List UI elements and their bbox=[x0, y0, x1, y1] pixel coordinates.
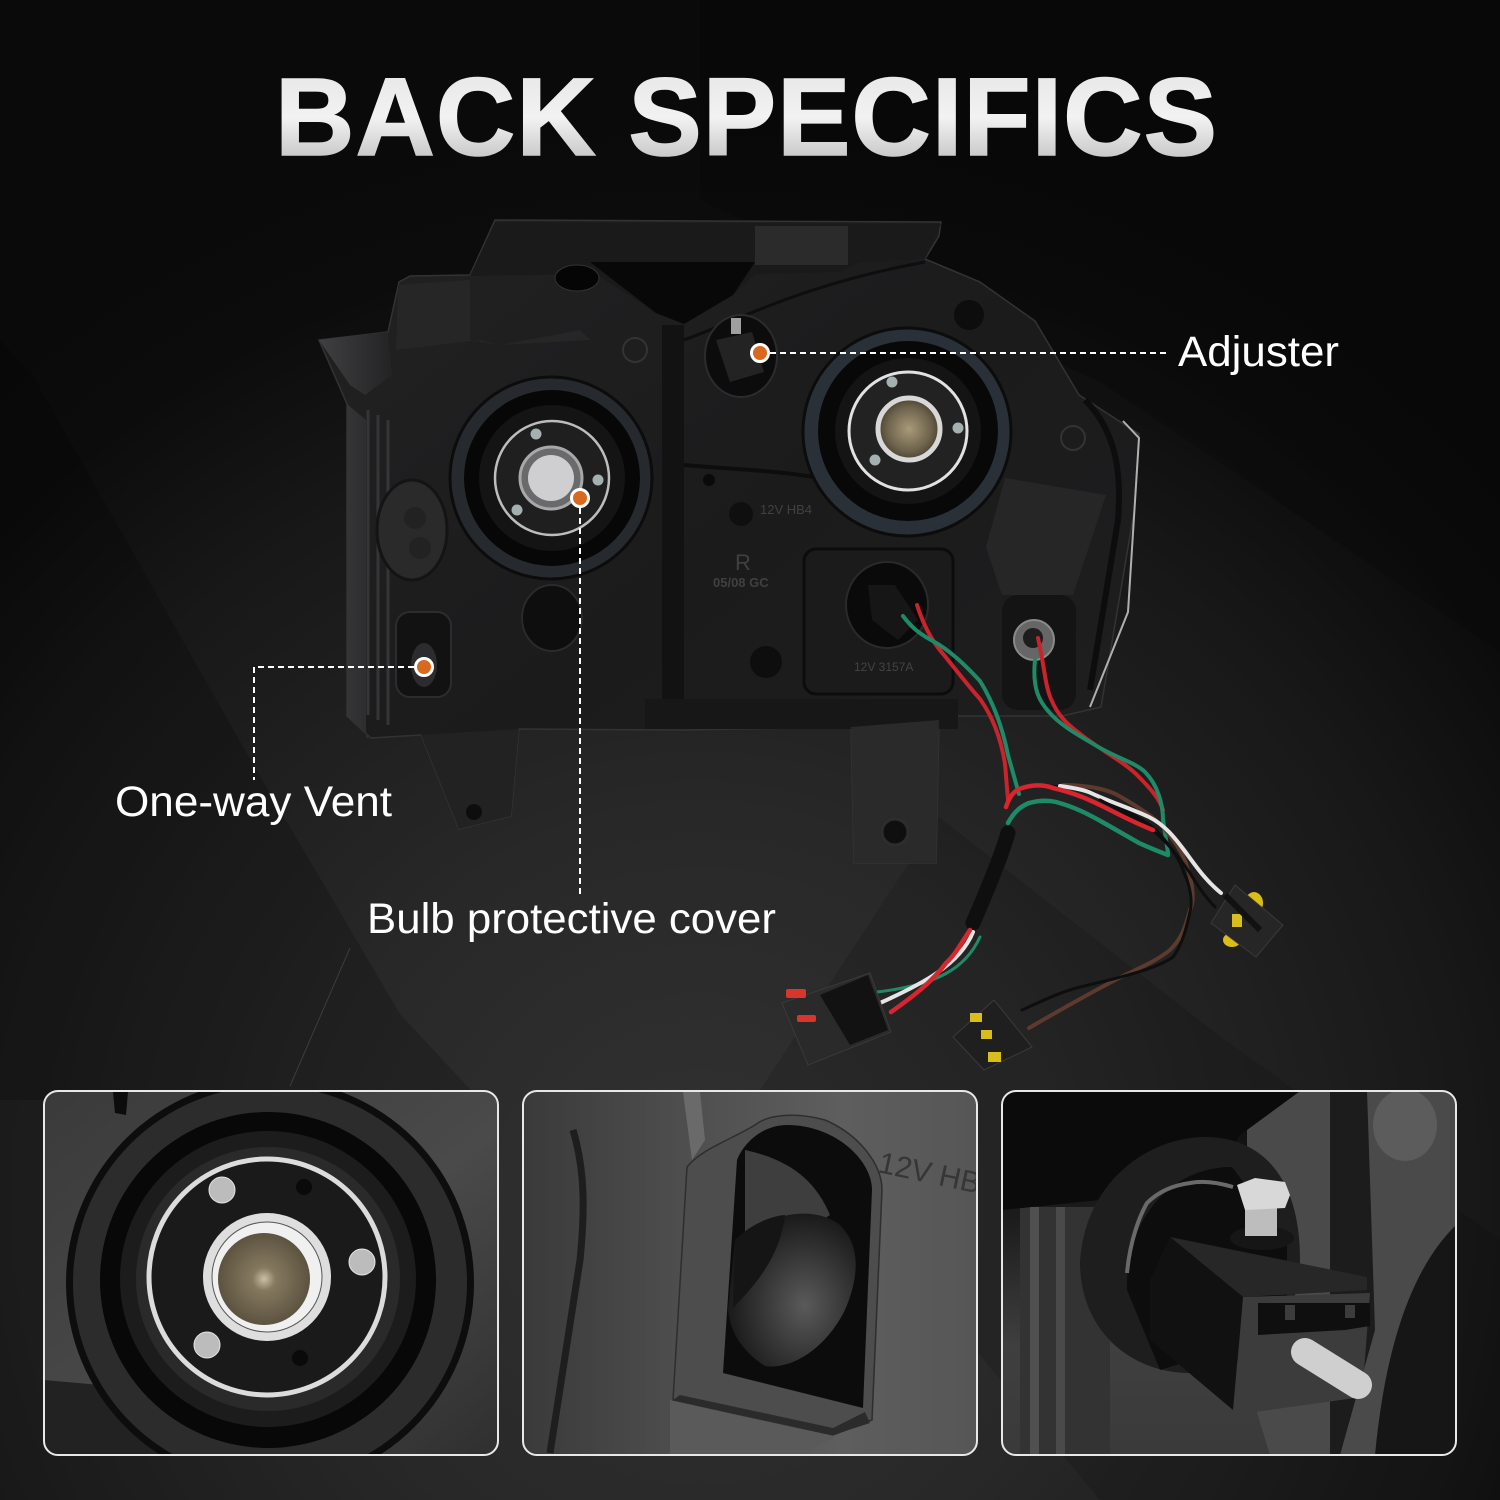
adjuster bolt bbox=[1230, 1178, 1294, 1250]
headlight back housing bbox=[319, 220, 1139, 863]
panel: bulb socket close-up bbox=[44, 1079, 498, 1487]
panel: adjuster close-up bbox=[1002, 1089, 1456, 1455]
left bulb socket bbox=[450, 377, 652, 579]
moulded labels bbox=[713, 502, 812, 590]
panel: rear socket close-up bbox=[523, 1091, 984, 1455]
panel: rear socket close-up: 12V HB bbox=[876, 1147, 984, 1200]
rear socket panel bbox=[804, 549, 953, 694]
side socket bbox=[1014, 620, 1054, 660]
left rim strip bbox=[319, 332, 392, 738]
right bulb socket bbox=[803, 328, 1011, 536]
callout: adjuster: Adjuster bbox=[1178, 328, 1339, 376]
callout: bulb protective cover: Bulb protective cover bbox=[367, 895, 776, 943]
callout: one-way vent bbox=[115, 658, 432, 826]
connector: right bbox=[1211, 885, 1283, 957]
connector: lower bbox=[953, 1000, 1032, 1070]
divider bbox=[662, 325, 684, 700]
callout: adjuster bbox=[752, 328, 1339, 376]
adjuster threaded screw bbox=[1305, 1352, 1358, 1385]
rear socket panel: 12V 3157A bbox=[854, 660, 913, 674]
callout: one-way vent: One-way Vent bbox=[115, 778, 392, 826]
title: BACK SPECIFICS bbox=[275, 56, 1217, 179]
moulded labels: 12V HB4 bbox=[760, 502, 812, 517]
wiring harness bbox=[877, 605, 1221, 1028]
moulded labels: 05/08 GC bbox=[713, 575, 769, 590]
callout: bulb protective cover bbox=[367, 490, 776, 943]
adjuster body bbox=[1170, 1237, 1370, 1412]
housing silhouette bbox=[319, 220, 1139, 863]
moulded labels: R bbox=[735, 550, 751, 575]
adjuster knob bbox=[705, 315, 777, 397]
upper flange bbox=[470, 222, 941, 324]
connector: centre left bbox=[782, 973, 891, 1065]
